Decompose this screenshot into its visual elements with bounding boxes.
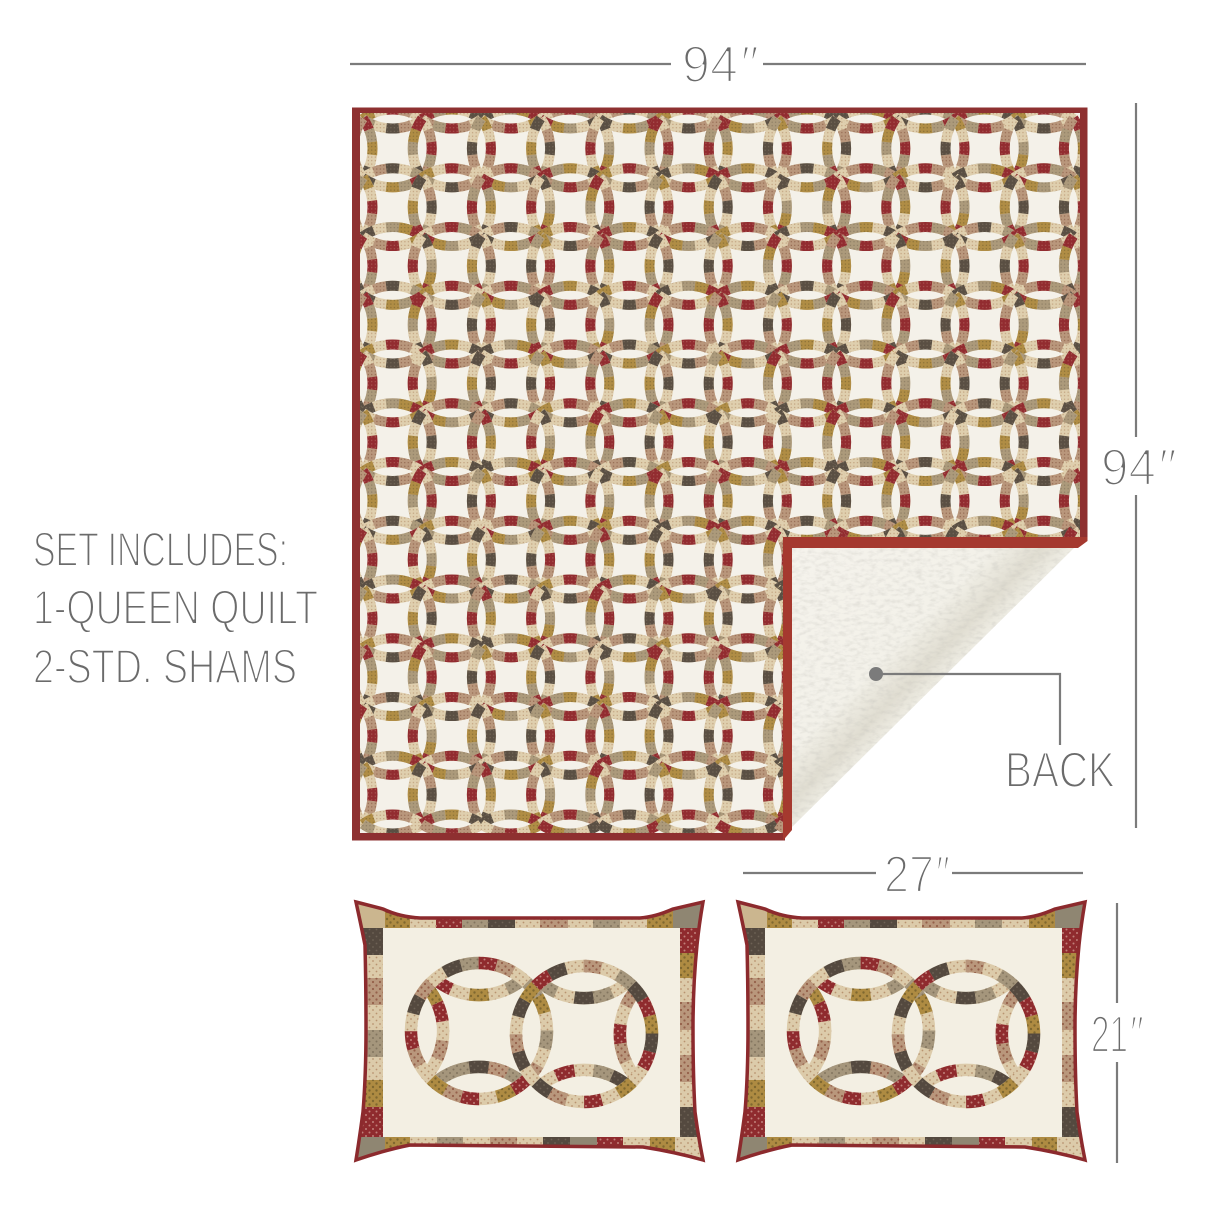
panel: set contents text: SET INCLUDES: xyxy=(33,524,288,577)
quilt binding and base xyxy=(352,108,1088,840)
dimension: sham height 21 inches: ″ xyxy=(1128,1006,1143,1064)
sham center panel xyxy=(383,928,680,1137)
right ring inner arcs xyxy=(540,982,636,1086)
left interlocking ring xyxy=(411,963,547,1099)
fold cut-out xyxy=(785,537,1095,848)
callout: back label with leader: BACK xyxy=(1005,742,1115,798)
dimension: sham width 27 inches: ″ xyxy=(934,846,949,904)
panel: right pillow sham xyxy=(732,895,1092,1170)
dimension: sham height 21 inches: 21 xyxy=(1091,1006,1128,1064)
dimension: quilt length 94 inches: ″ xyxy=(1156,439,1176,497)
quilt back xyxy=(791,546,1076,828)
sham binding xyxy=(356,902,703,1160)
folded binding xyxy=(783,537,1088,840)
dimension: sham width 27 inches: 27 xyxy=(884,846,934,904)
dimension: quilt width 94 inches: 94 xyxy=(682,36,738,94)
dimension: quilt length 94 inches: 94 xyxy=(1101,439,1156,497)
dimension: quilt width 94 inches: ″ xyxy=(738,36,758,94)
panel: set contents text: 1-QUEEN QUILT xyxy=(33,582,318,635)
dimension: sham height 21 inches xyxy=(1091,903,1143,1163)
dimension: sham width 27 inches xyxy=(743,846,1083,904)
panel: set contents text xyxy=(33,524,318,694)
callout: back label with leader xyxy=(869,667,1115,798)
panel: left pillow sham xyxy=(350,895,710,1170)
panel: queen quilt with folded corner xyxy=(352,108,1095,848)
panel: set contents text: 2-STD. SHAMS xyxy=(33,641,297,694)
wedding ring pattern xyxy=(353,109,1083,834)
dimension: quilt width 94 inches xyxy=(350,36,1086,94)
sham patchwork border xyxy=(350,895,710,1170)
right interlocking ring xyxy=(516,966,652,1102)
dimension: quilt length 94 inches xyxy=(1101,103,1176,828)
left ring inner arcs xyxy=(427,979,523,1083)
